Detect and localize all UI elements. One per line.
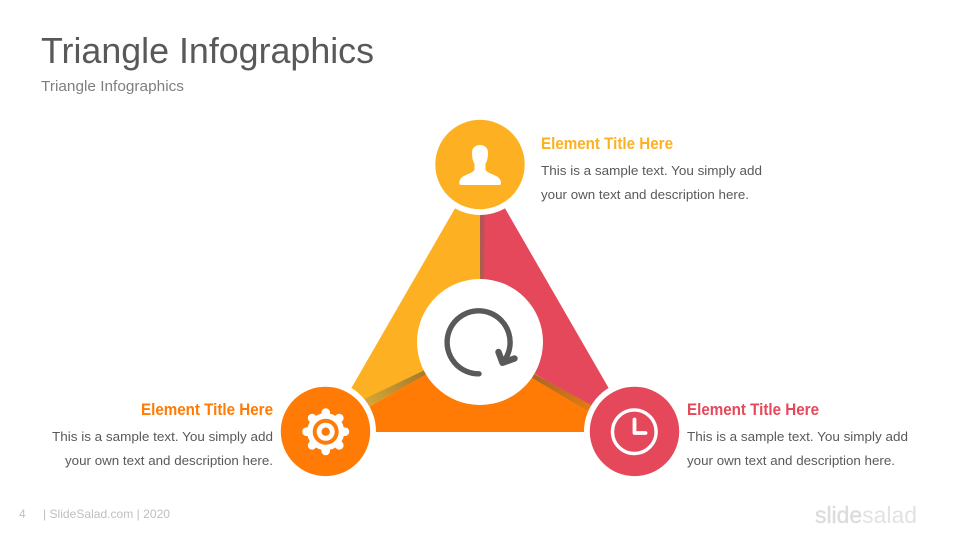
segment: red bbox=[480, 165, 634, 432]
center circle with refresh icon bbox=[417, 279, 543, 405]
logo: slidesalad: slidesalad bbox=[815, 502, 917, 528]
node: left orange circle bbox=[275, 381, 376, 482]
text block: top element: This is a sample text. You simply add bbox=[541, 163, 762, 178]
segment: orange bbox=[326, 342, 634, 432]
icon: clock bbox=[612, 410, 656, 454]
text block: right element bbox=[687, 401, 908, 468]
segment: yellow bbox=[326, 165, 480, 432]
text block: left element: This is a sample text. You simply add bbox=[52, 429, 273, 444]
triangle diagram bbox=[326, 165, 634, 432]
text block: left element: Element Title Here bbox=[141, 401, 273, 419]
footer: credit: | SlideSalad.com | 2020 bbox=[43, 507, 170, 521]
node: top yellow circle bbox=[430, 114, 530, 215]
shadow: right fold bbox=[530, 373, 595, 410]
icon: person bbox=[459, 145, 501, 185]
shadow: top fold bbox=[480, 205, 484, 285]
icon: gear bbox=[306, 412, 345, 451]
text block: right element: This is a sample text. You simply add bbox=[687, 429, 908, 444]
text block: top element: Element Title Here bbox=[541, 135, 673, 153]
text block: top element: your own text and description here. bbox=[541, 187, 749, 202]
footer: page number: 4 bbox=[19, 507, 26, 521]
title: Triangle Infographics bbox=[41, 30, 374, 71]
shadow: left fold bbox=[362, 370, 428, 407]
node: right red circle bbox=[584, 381, 685, 482]
text block: left element bbox=[52, 401, 273, 468]
text block: top element bbox=[541, 135, 762, 202]
text block: right element: Element Title Here bbox=[687, 401, 819, 419]
icon: refresh arrow bbox=[447, 311, 514, 374]
subtitle: Triangle Infographics bbox=[41, 78, 184, 95]
text block: right element: your own text and description here. bbox=[687, 453, 895, 468]
text block: left element: your own text and description here. bbox=[65, 453, 273, 468]
